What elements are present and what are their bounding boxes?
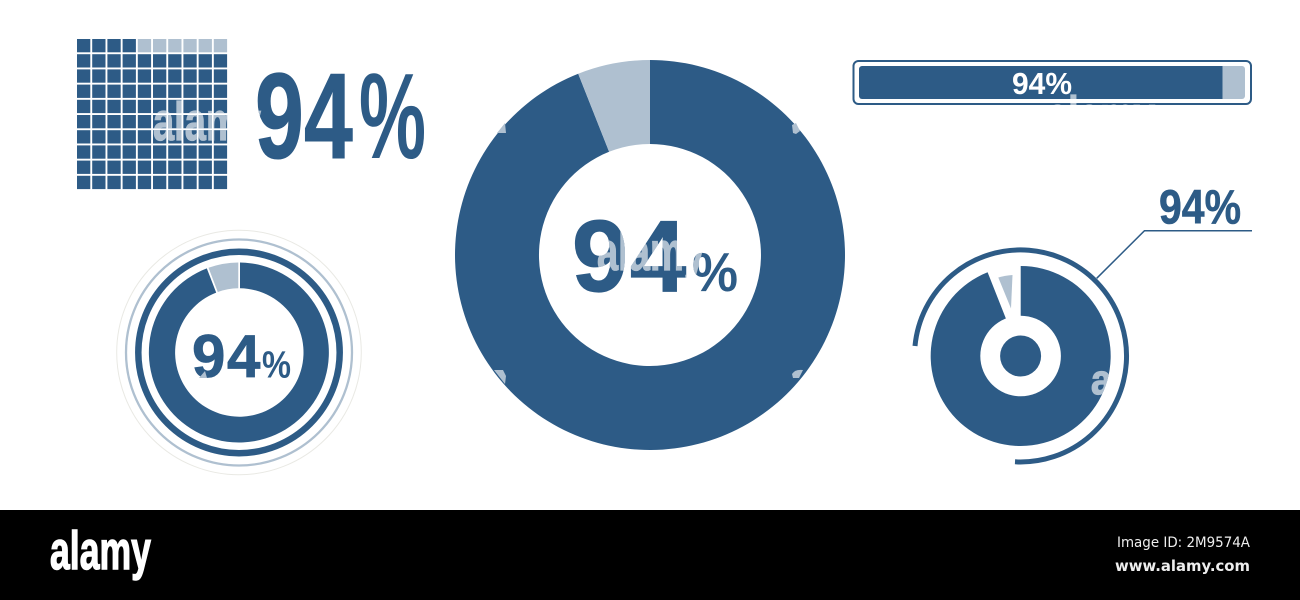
watermark: centre: alamy bbox=[597, 222, 705, 282]
leader line bbox=[1097, 231, 1252, 278]
heading: large condensed 94% bbox=[255, 48, 426, 184]
footer band bbox=[0, 510, 1300, 600]
large donut remaining segment bbox=[578, 60, 650, 152]
footer logo: alamy bbox=[50, 521, 151, 581]
large donut filled segment bbox=[455, 60, 845, 450]
watermark fragments on the large donut edge bbox=[494, 123, 803, 384]
ringed donut remaining segment bbox=[208, 262, 238, 292]
footer image id: Image ID: 2M9574A bbox=[1117, 535, 1250, 551]
pie filled segment bbox=[931, 266, 1111, 446]
label: donut center 94: 94 bbox=[572, 201, 686, 313]
label: donut center percent sign: % bbox=[692, 241, 738, 303]
bar outline bbox=[854, 61, 1251, 104]
heading digits: 94 bbox=[255, 48, 353, 184]
white hub ring bbox=[980, 316, 1061, 396]
chart: large donut bbox=[455, 60, 845, 450]
faint outer ring bbox=[117, 230, 361, 475]
chart: progress bar bbox=[854, 61, 1251, 104]
footer url: www.alamy.com bbox=[1115, 557, 1250, 575]
callout value: 94% bbox=[1159, 182, 1241, 234]
chart: pie with centre hub and arc bbox=[915, 182, 1252, 462]
dark ring bbox=[138, 252, 340, 453]
light ring bbox=[126, 240, 352, 466]
bar remaining segment bbox=[1200, 66, 1245, 99]
ringed donut filled segment bbox=[149, 262, 329, 442]
bar label: 94% bbox=[1012, 66, 1072, 101]
panel: waffle grid 94 of 100 bbox=[77, 39, 227, 189]
ringed donut 94: 94 bbox=[192, 323, 261, 390]
watermark fragment in the nine bbox=[199, 371, 207, 378]
heading percent sign: % bbox=[359, 48, 426, 184]
watermark: grid: alamy bbox=[153, 92, 261, 152]
chart: ringed donut bbox=[117, 230, 361, 475]
small remaining wedge bbox=[998, 275, 1012, 308]
watermark: bar: alamy bbox=[1047, 86, 1155, 146]
outer arc bbox=[915, 250, 1127, 462]
bar filled segment bbox=[859, 66, 1222, 99]
ringed donut percent sign: % bbox=[262, 344, 291, 386]
watermark: right pie: a bbox=[1091, 356, 1113, 403]
dark hub bbox=[1000, 336, 1041, 376]
